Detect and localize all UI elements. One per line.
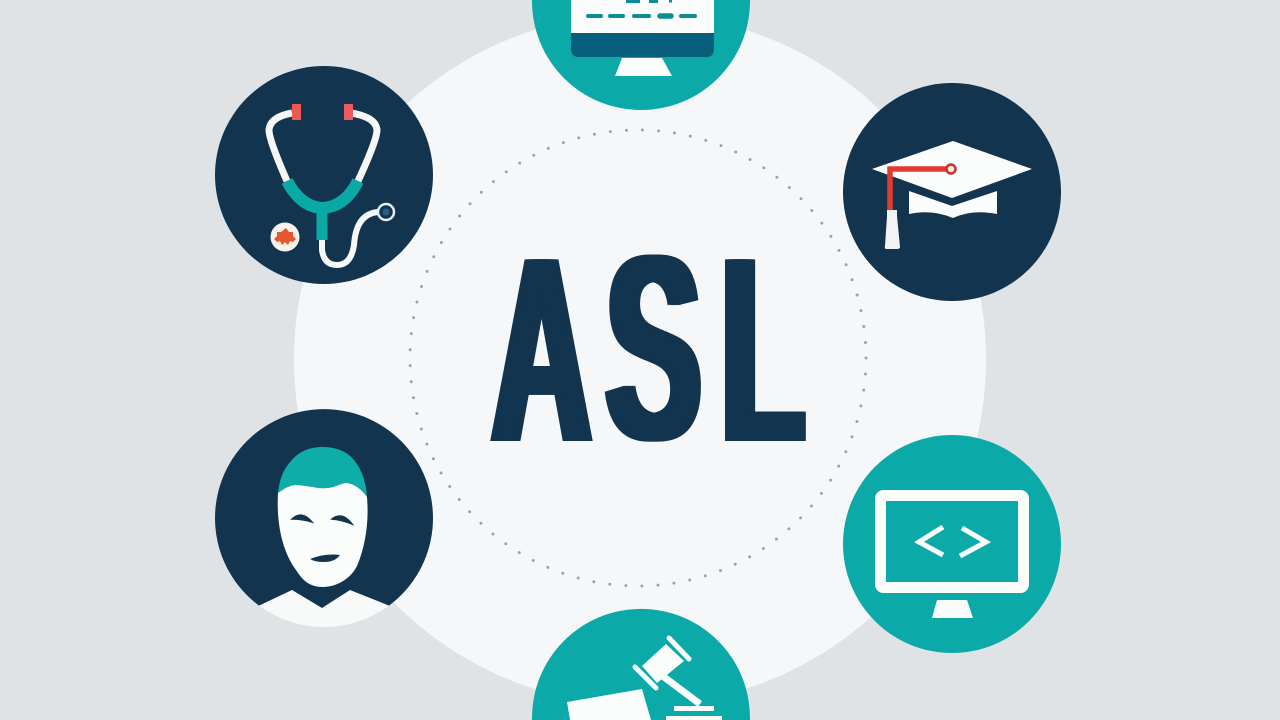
title: ASL	[490, 200, 806, 497]
icon: graduation cap	[843, 83, 1061, 301]
title: ASL: S	[606, 200, 701, 495]
icon: code monitor	[843, 435, 1061, 653]
dotted ring	[410, 130, 866, 586]
icon: stethoscope	[215, 66, 433, 284]
icon: computer monitor (top)	[532, 0, 750, 110]
icon: person face	[215, 409, 433, 627]
icon: gavel	[532, 609, 750, 720]
central white disc	[294, 13, 986, 705]
title: ASL: A	[492, 202, 591, 497]
title: ASL: L	[721, 202, 805, 497]
